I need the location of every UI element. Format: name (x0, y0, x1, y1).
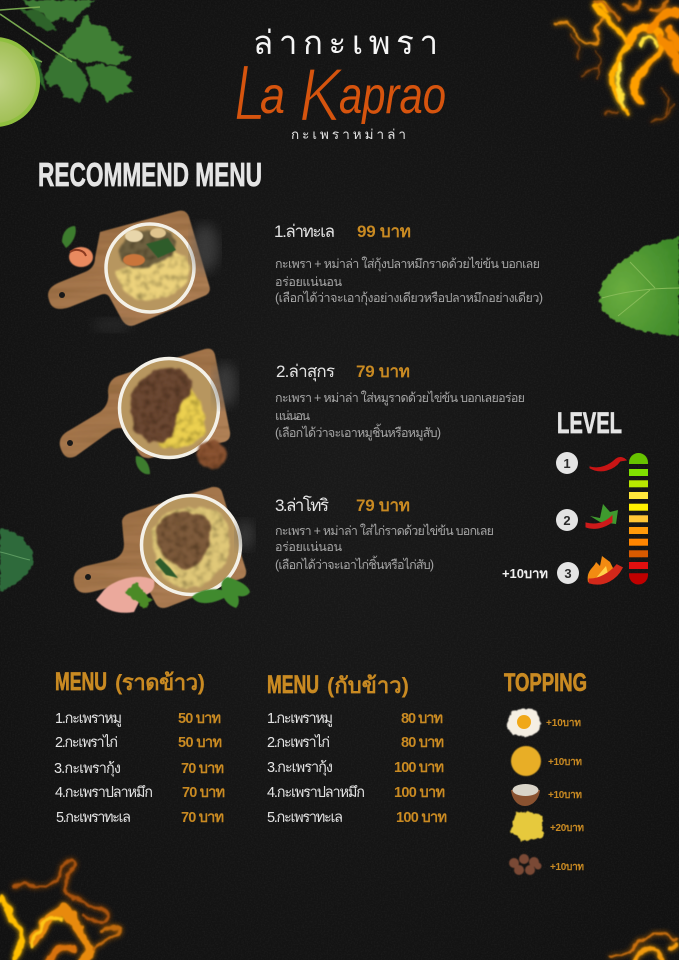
icon: single chili (590, 457, 626, 471)
icon: flames, bottom left (0, 860, 119, 960)
badge: level 2: 2 (563, 513, 571, 528)
badge: level 2 (556, 509, 578, 531)
text: dish 3 description: กะเพรา + หม่าล่า ใส่ไก่ราดด้วยไข่ข้น บอกเลย (275, 524, 494, 538)
list: menu 2 items: 4.กะเพราปลาหมึก (267, 785, 365, 801)
text: dish 1 description: (เลือกได้ว่าจะเอากุ้งอย่างเดียวหรือปลาหมึกอย่างเดียว) (275, 291, 543, 306)
text: dish 1 name: 1.ล่าทะเล (274, 222, 335, 241)
text: +10 baht surcharge: +10บาท (502, 566, 548, 581)
text: dish 1 description (275, 257, 543, 306)
chart: spice gauge (629, 453, 648, 584)
list: menu 2 items (267, 711, 447, 826)
icon: mint leaf, left (0, 528, 33, 591)
text: sausage price: +10บาท (550, 862, 584, 873)
list: menu 2 items: 100 บาท (394, 760, 444, 776)
heading: menu 2: MENU (267, 671, 319, 699)
icon: parsley and lime, top left (0, 0, 134, 127)
badge: level 1 (556, 452, 578, 474)
list: menu 1 items: 70 บาท (181, 810, 224, 826)
text: rice price: +10บาท (548, 790, 582, 801)
title: La Kaprao script logo: K (299, 53, 345, 138)
list: menu 2 items: 80 บาท (401, 735, 444, 751)
icon: chicken board (74, 487, 254, 613)
icon: rice bowl (511, 784, 540, 806)
title: La Kaprao script logo: a (260, 67, 285, 125)
icon: omelette (511, 746, 541, 776)
panel: spice level (502, 407, 648, 584)
panel: toppings (504, 669, 587, 875)
list: menu 2 items: 1.กะเพราหมู (267, 711, 333, 727)
heading: menu 1: (ราดข้าว) (115, 670, 205, 695)
list: menu 1 items: 3.กะเพรากุ้ง (54, 760, 121, 777)
icon: mint leaf, right (599, 237, 679, 335)
text: dish 1 description: กะเพรา + หม่าล่า ใส่กุ้งปลาหมึกราดด้วยไข่ข้น บอกเลย (275, 257, 540, 272)
icon: sliced sausage (509, 854, 542, 875)
text: dish 2 description: กะเพรา + หม่าล่า ใส่หมูราดด้วยไข่ข้น บอกเลยอร่อย (275, 391, 525, 406)
list: menu 1 items: 50 บาท (178, 735, 222, 751)
text: dish 2 description: แน่นอน (275, 409, 310, 423)
list: menu 1 items: 2.กะเพราไก่ (55, 733, 118, 751)
heading: menu 2 (267, 671, 409, 699)
panel: menu with rice on side (267, 671, 447, 826)
title: La Kaprao script logo (234, 48, 446, 138)
panel: recommended dish 2 (60, 349, 525, 474)
title: La Kaprao script logo: aprao (339, 67, 446, 125)
list: menu 1 items: 50 บาท (178, 711, 221, 727)
subtitle: กะเพราหม่าล่า (291, 127, 406, 142)
list: menu 2 items: 5.กะเพราทะเล (267, 810, 343, 826)
list: menu 2 items: 80 บาท (401, 711, 443, 727)
panel: menu with rice on top (54, 668, 225, 826)
badge: level 1: 1 (563, 456, 571, 471)
list: menu 1 items: 70 บาท (182, 785, 225, 801)
list: menu 2 items: 3.กะเพรากุ้ง (267, 759, 333, 776)
list: menu 1 items (54, 711, 225, 826)
list: menu 2 items: 2.กะเพราไก่ (267, 733, 330, 751)
icon: flames, top right (552, 0, 679, 122)
text: dish 1 description: อร่อยแน่นอน (275, 275, 342, 289)
text: dish 2 description (275, 391, 525, 441)
text: dish 3 description: อร่อยแน่นอน (275, 540, 342, 554)
title: Thai heading: ล่ากะเพรา (253, 24, 438, 61)
list: menu 1 items: 1.กะเพราหมู (55, 711, 122, 727)
heading: menu 2: (กับข้าว) (327, 673, 409, 698)
list: menu 1 items: 4.กะเพราปลาหมึก (55, 785, 153, 801)
text: dish 1 price: 99 บาท (357, 222, 411, 241)
text: omelette price: +10บาท (548, 757, 582, 768)
text: dish 2 name: 2.ล่าสุกร (276, 362, 335, 382)
heading: recommend menu: RECOMMEND MENU (38, 156, 262, 193)
text: dish 3 name: 3.ล่าโทริ (275, 495, 329, 515)
panel: recommended dish 3 (74, 487, 494, 613)
heading: level: LEVEL (557, 407, 622, 440)
text: dish 3 description (275, 524, 494, 572)
list: menu 2 items: 100 บาท (396, 810, 447, 826)
icon: seafood board (48, 211, 219, 332)
icon: scrambled egg (511, 811, 543, 841)
icon: flames, bottom right (610, 933, 679, 960)
icon: fried egg (507, 708, 541, 736)
text: egg price: +10บาท (546, 718, 581, 729)
text: dish 2 price: 79 บาท (356, 362, 410, 381)
icon: pork board (60, 349, 237, 474)
icon: flaming chili (588, 556, 621, 583)
heading: topping: TOPPING (504, 669, 587, 697)
text: dish 3 price: 79 บาท (356, 496, 410, 515)
badge: level 3 (557, 562, 579, 584)
list: menu 1 items: 5.กะเพราทะเล (56, 810, 131, 826)
title: La Kaprao script logo: L (234, 48, 266, 137)
text: scrambled egg price: +20บาท (550, 823, 584, 834)
text: dish 2 description: (เลือกได้ว่าจะเอาหมูชิ้นหรือหมูสับ) (275, 423, 441, 441)
list: menu 2 items: 100 บาท (394, 785, 445, 801)
icon: chili with leaves (586, 504, 618, 528)
list: menu 1 items: 70 บาท (181, 761, 224, 777)
panel: recommended dish 1 (48, 211, 543, 332)
text: dish 3 description: (เลือกได้ว่าจะเอาไก่ชิ้นหรือไก่สับ) (275, 555, 434, 572)
badge: level 3: 3 (564, 566, 572, 581)
heading: menu 1 (55, 668, 205, 696)
heading: menu 1: MENU (55, 668, 107, 696)
